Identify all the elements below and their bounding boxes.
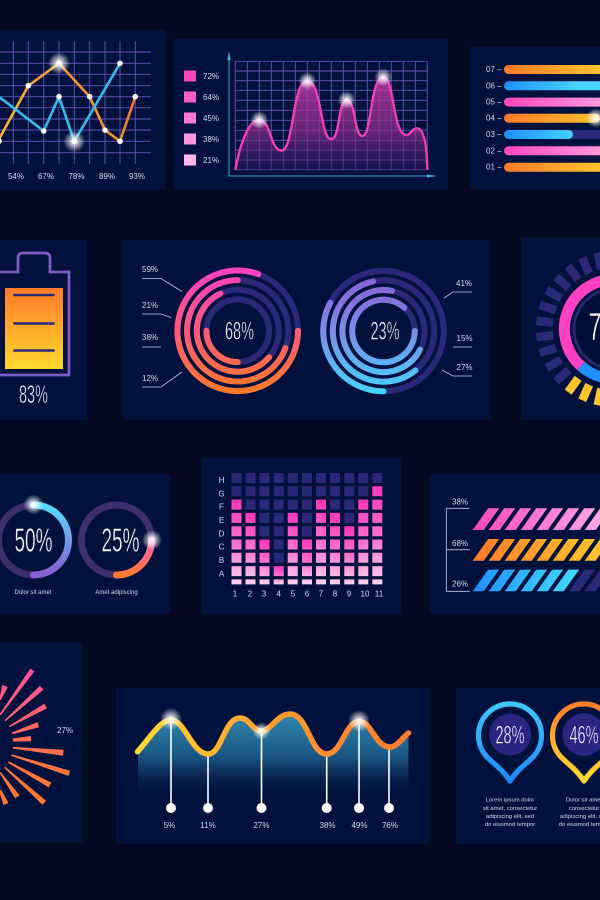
pin labels: 27% (253, 821, 270, 830)
wave line (138, 714, 408, 754)
right ring labels (442, 279, 473, 376)
left ring labels: 21% (142, 301, 158, 310)
x axis labels: 78% (68, 172, 85, 181)
heatmap column labels (233, 590, 384, 598)
gauge inner ring (574, 289, 600, 369)
bracket labels: 68% (452, 539, 468, 548)
pin labels (164, 821, 398, 830)
wave glows (160, 708, 370, 740)
donut 50% (0, 494, 68, 575)
panel: radial bars (0, 643, 83, 843)
heatmap row labels: G (218, 489, 225, 498)
legend: 45% (203, 114, 219, 123)
panel: area chart (174, 39, 448, 189)
orange stripes (473, 539, 600, 561)
panel: battery (0, 240, 87, 420)
donut captions (14, 590, 138, 596)
panel: heatmap (201, 458, 401, 614)
bar glow (586, 108, 600, 128)
orange data line (0, 63, 135, 141)
bars (504, 65, 600, 172)
heatmap column labels: 6 (305, 590, 310, 598)
pink stripes (473, 508, 600, 530)
heatmap row labels: C (219, 543, 225, 552)
right ring labels: 15% (456, 334, 473, 343)
panel: horizontal bars (470, 47, 600, 189)
battery fill (5, 288, 63, 369)
battery marks (14, 295, 54, 350)
bar labels: 04 – (486, 114, 502, 122)
bar labels (486, 65, 502, 172)
pin 28% caption (483, 798, 537, 828)
legend: 38% (203, 135, 219, 144)
bar labels: 06 – (486, 82, 502, 90)
radial spikes (0, 668, 70, 805)
pin labels: 11% (200, 821, 216, 830)
blue stripes (473, 570, 579, 591)
axis arrows (227, 51, 437, 178)
heatmap row labels: F (219, 503, 224, 512)
panel: striped bars (429, 474, 600, 614)
donut captions: Dolor sit amet (14, 590, 52, 596)
battery outline (0, 253, 69, 375)
data points (0, 60, 138, 144)
panel: radial gauge (521, 237, 600, 420)
right ring chart: 23% (370, 318, 400, 346)
pin labels: 76% (382, 821, 398, 830)
area fill (235, 77, 427, 170)
bar labels: 01 – (486, 162, 502, 172)
chart glows (48, 52, 85, 152)
pin 28%: 28% (496, 722, 524, 750)
pin 46% caption (559, 798, 600, 828)
bar labels: 07 – (486, 65, 502, 74)
pin 46% (553, 704, 600, 781)
legend: 72% (203, 72, 219, 81)
heatmap empty cells (232, 473, 382, 563)
donut 25% (82, 505, 162, 575)
blue data line (0, 63, 120, 141)
pin 28% caption: do eiusmod tempor (485, 822, 535, 828)
donut captions: Amet adipiscing (95, 590, 138, 596)
pin 28% caption: Lorem ipsum dolor (486, 798, 534, 804)
radial label: 27% (57, 726, 73, 735)
panel: map pins (456, 688, 600, 844)
heatmap row labels: A (219, 569, 225, 578)
pin dots (166, 803, 394, 813)
right ring labels: 27% (456, 363, 473, 372)
bracket labels: 38% (452, 498, 468, 506)
panel: ring charts (123, 240, 491, 420)
gauge pink arc (564, 279, 600, 366)
heatmap column labels: 9 (347, 590, 352, 598)
panel: donut charts (0, 474, 171, 614)
pin 46% caption: consectetur (569, 806, 599, 812)
heatmap column labels: 4 (276, 590, 281, 598)
left ring chart (177, 270, 298, 391)
right ring chart (323, 271, 444, 391)
x axis labels (8, 172, 145, 181)
heatmap column labels: 5 (291, 590, 296, 598)
left ring labels: 38% (142, 333, 158, 342)
heatmap row labels: B (219, 556, 224, 565)
heatmap column labels: 10 (361, 590, 370, 598)
gauge blue arc (581, 366, 600, 379)
heatmap column labels: 7 (319, 590, 324, 598)
pin 28% (479, 704, 542, 781)
heatmap filled cells (232, 486, 382, 584)
x axis labels: 54% (8, 172, 24, 181)
heatmap row labels: H (219, 476, 225, 485)
heatmap column labels: 8 (333, 590, 338, 598)
bracket (446, 508, 470, 591)
left ring labels: 12% (142, 374, 158, 383)
donut 25%: 25% (102, 522, 140, 558)
pin labels: 38% (319, 821, 336, 830)
heatmap column labels: 11 (375, 590, 384, 598)
peak glows (250, 68, 392, 129)
right ring labels: 41% (456, 279, 472, 288)
legend: 64% (203, 93, 219, 102)
legend: 21% (203, 156, 219, 165)
bracket labels (452, 498, 468, 588)
x axis labels: 93% (129, 172, 145, 181)
pin 28% caption: adipiscing elit, sed (486, 814, 534, 820)
axes (229, 56, 430, 176)
pin stems (171, 720, 389, 808)
battery value: 83% (19, 381, 48, 409)
panel: line chart (0, 30, 165, 190)
heatmap column labels: 2 (248, 590, 253, 598)
gauge ticks (536, 253, 600, 405)
x axis labels: 67% (38, 172, 54, 181)
pin labels: 49% (351, 821, 368, 830)
bar labels: 02 – (486, 146, 502, 156)
heatmap column labels: 3 (262, 590, 267, 598)
legend (184, 70, 219, 166)
pin labels: 5% (164, 821, 175, 830)
heatmap row labels (218, 476, 225, 578)
heatmap column labels: 1 (233, 590, 238, 598)
left ring labels (142, 265, 182, 387)
panel: wave chart (116, 688, 429, 844)
donut 50%: 50% (14, 522, 53, 558)
bar labels: 03 – (486, 130, 502, 139)
left ring chart: 68% (225, 318, 254, 346)
unfilled stripes (569, 570, 600, 591)
pink curve (235, 77, 427, 170)
bar labels: 05 – (486, 98, 502, 106)
bracket labels: 26% (452, 580, 468, 588)
heatmap row labels: E (219, 516, 224, 525)
x axis labels: 89% (99, 172, 115, 181)
wave area (138, 714, 408, 806)
pin 28% caption: sit amet, consectetur (483, 806, 537, 812)
heatmap row labels: D (219, 529, 225, 538)
left ring labels: 59% (142, 265, 158, 274)
